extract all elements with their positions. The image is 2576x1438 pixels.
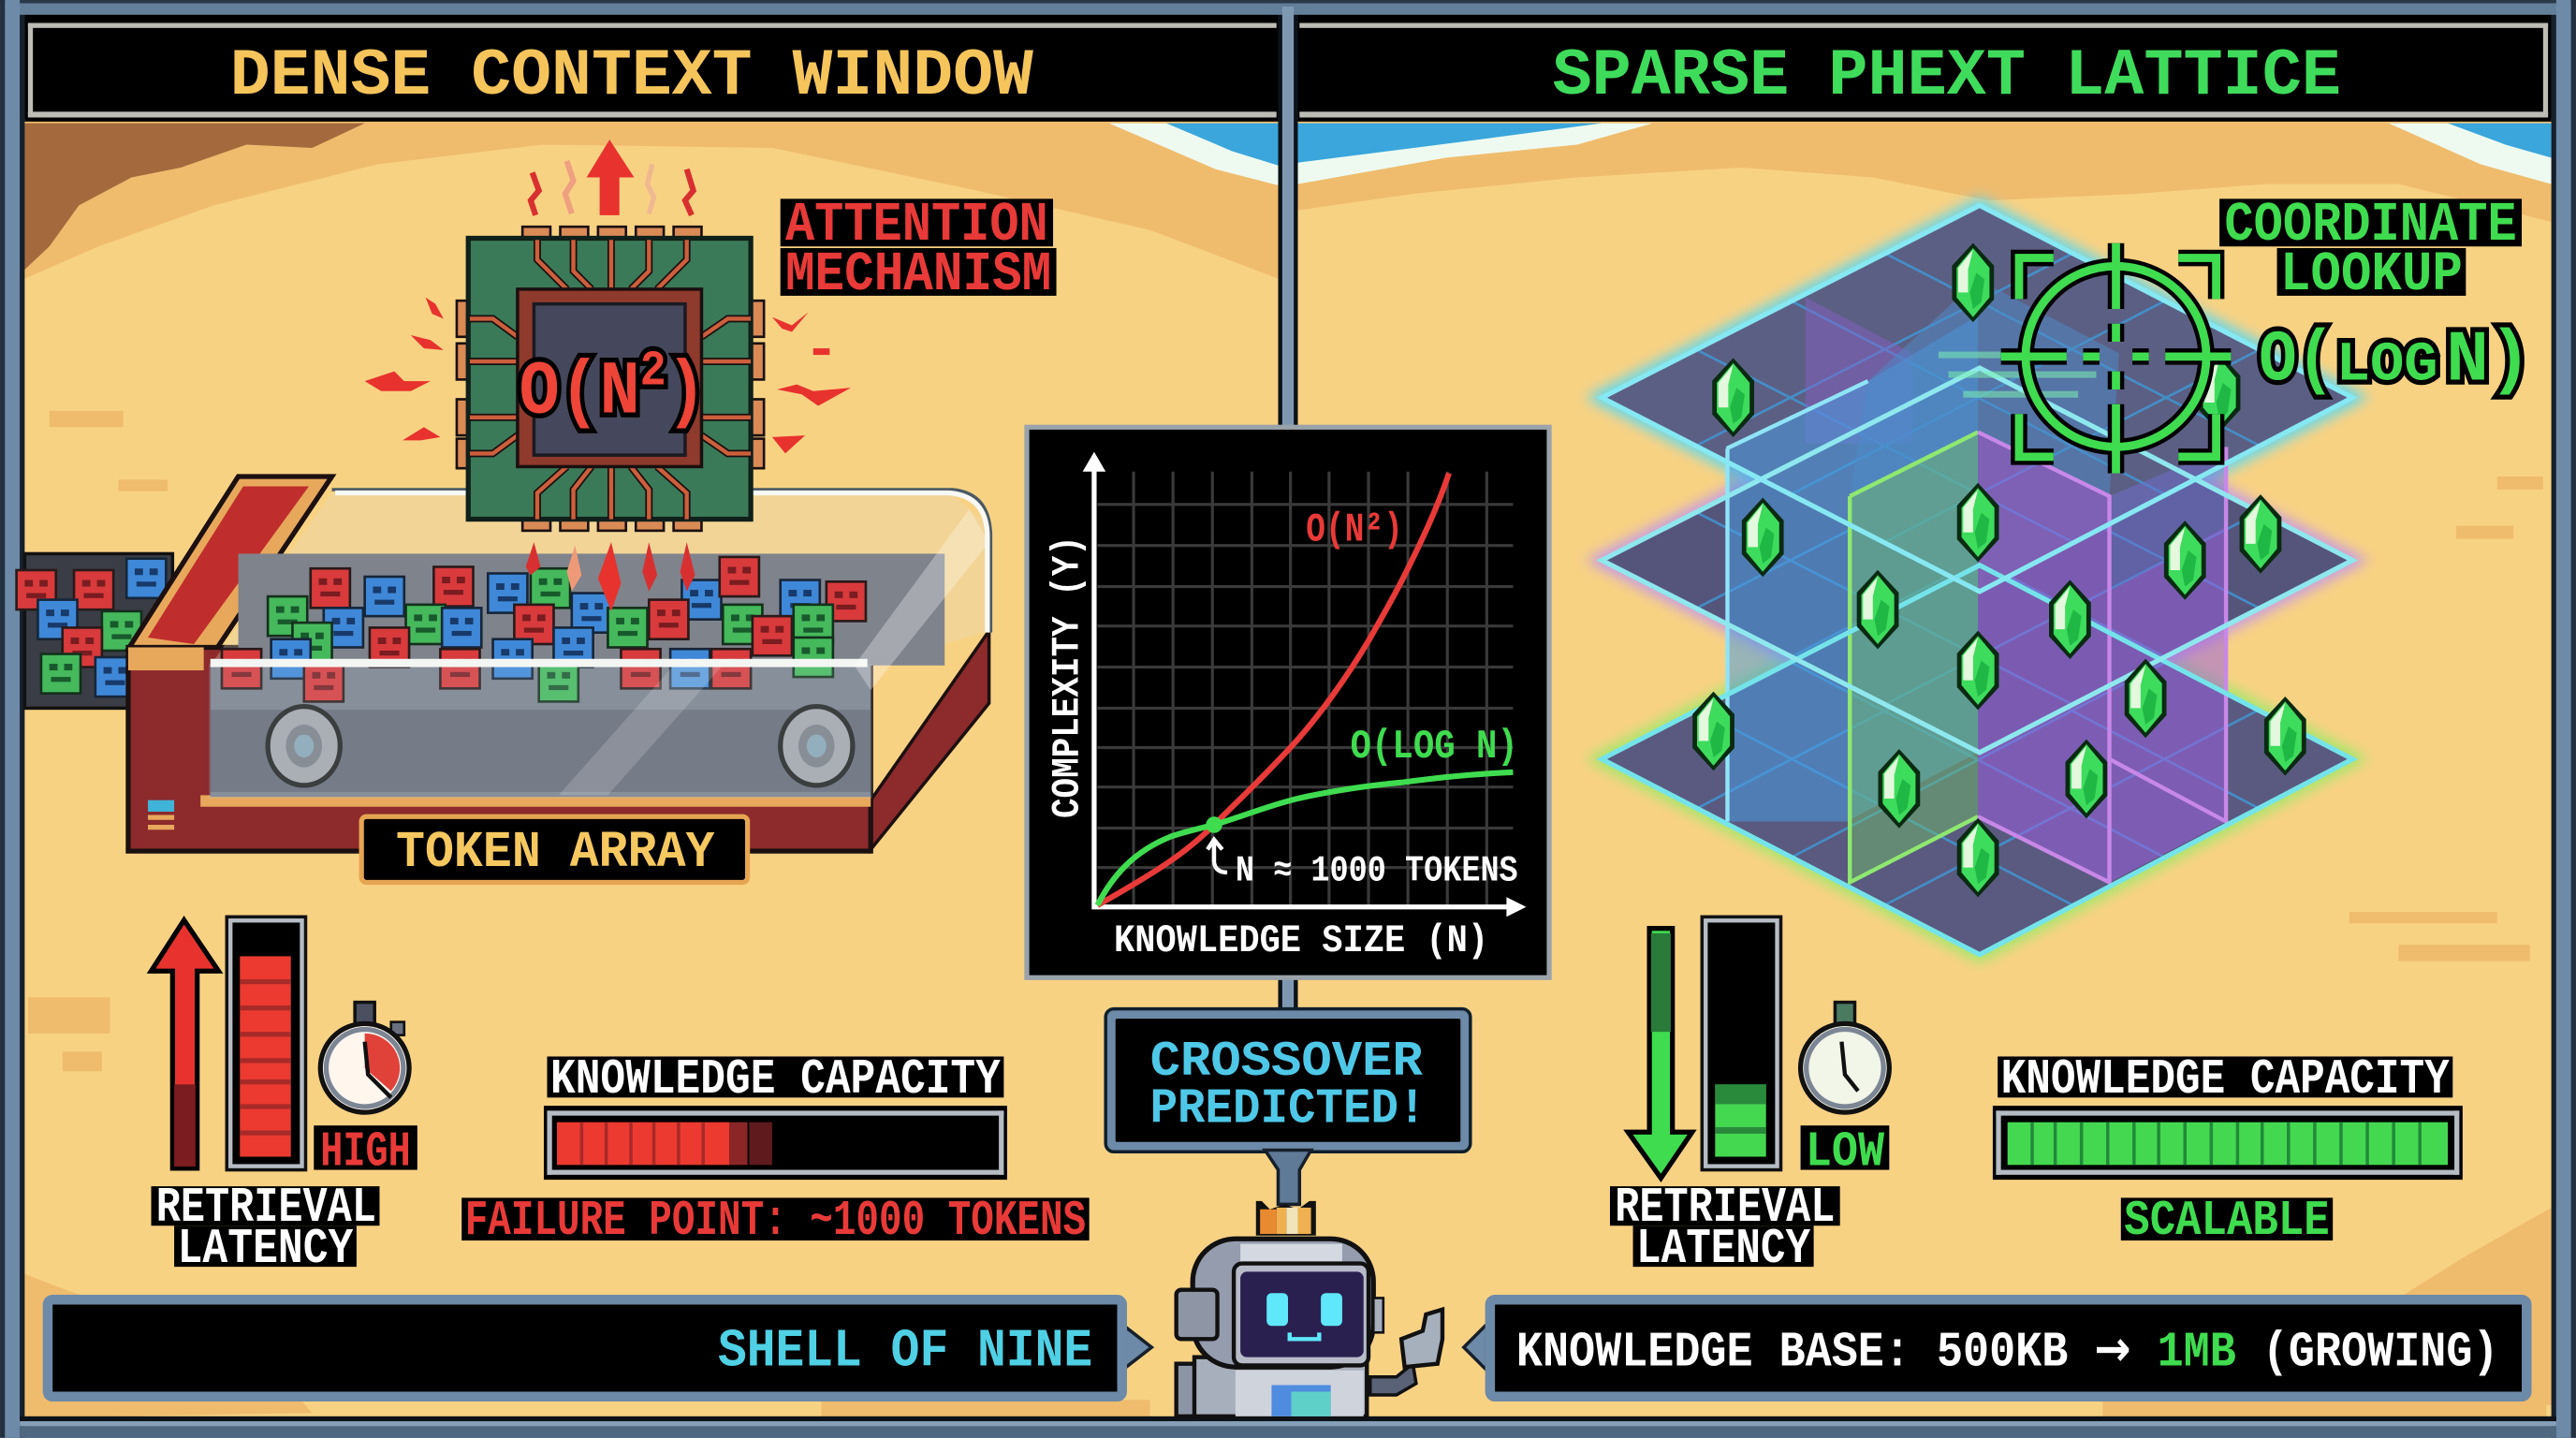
curve: O(N^2) — [1097, 473, 1449, 905]
icon: sparks — [365, 298, 851, 453]
label: failure point: FAILURE POINT: ~1000 TOKENS — [465, 1193, 1086, 1249]
tokens — [222, 557, 866, 701]
callout: crossover predicted: CROSSOVER — [1150, 1034, 1423, 1090]
label: retrieval latency: RETRIEVAL — [156, 1180, 376, 1236]
footer bar: knowledge base: KNOWLEDGE BASE: 500KB → 1MB (GROWING) — [1516, 1320, 2498, 1380]
icon: flames under chip — [526, 542, 695, 611]
icon: target reticle — [2001, 243, 2231, 473]
background: rock — [23, 124, 365, 271]
lattice: phext — [1602, 205, 2352, 955]
label: attention mechanism — [781, 193, 1057, 306]
icon: stopwatch red — [320, 1003, 409, 1112]
glow streaks — [1939, 352, 2096, 398]
latency bar high — [227, 917, 305, 1170]
footer bar: shell of nine — [48, 1299, 1151, 1397]
latency bar low — [1702, 917, 1781, 1170]
crown — [1256, 1201, 1316, 1236]
robot body — [1194, 1357, 1367, 1416]
wheels — [268, 707, 853, 785]
crossover label: N ≈ 1000 TOKENS — [1236, 851, 1518, 892]
label: O(log n): N) — [2446, 320, 2532, 402]
capacity gauge: sparse — [1993, 1051, 2463, 1249]
curve label: O(log N): O(LOG N) — [1351, 724, 1518, 770]
conveyor belt with tokens — [17, 553, 172, 708]
background: water left — [1109, 124, 1280, 185]
crossover point — [1206, 816, 1222, 833]
chip traces — [470, 240, 751, 520]
plate edges — [1602, 205, 2352, 955]
label: high: HIGH — [320, 1123, 411, 1180]
label: attention mechanism: MECHANISM — [785, 242, 1051, 306]
label: coordinate lookup: LOOKUP — [2280, 242, 2463, 306]
footer bar: shell of nine: SHELL OF NINE — [718, 1321, 1092, 1382]
robot right arm — [1370, 1310, 1442, 1395]
chip label: ) — [666, 351, 707, 436]
x axis label: KNOWLEDGE SIZE (N) — [1114, 918, 1488, 963]
robot left arm — [1177, 1364, 1219, 1416]
label: retrieval latency: RETRIEVAL — [1615, 1180, 1835, 1236]
heading bar: sparse phext lattice — [1298, 15, 2552, 122]
lattice glow — [1602, 205, 2352, 955]
label: O(log n): LOG — [2336, 332, 2438, 396]
latency gauge: dense — [152, 917, 417, 1277]
robot head — [1193, 1239, 1373, 1367]
capacity gauge: dense — [461, 1051, 1090, 1249]
bottom plate — [1602, 565, 2352, 955]
label: low: LOW — [1806, 1123, 1884, 1180]
marker arrow — [1208, 840, 1227, 873]
footer bar: knowledge base — [1464, 1299, 2526, 1397]
token array tray — [128, 477, 990, 851]
label: coordinate lookup: COORDINATE — [2224, 193, 2517, 257]
icon: stopwatch green — [1801, 1003, 1889, 1112]
connector to robot — [1265, 1151, 1311, 1204]
y axis label: COMPLEXITY (Y) — [1045, 536, 1090, 818]
robot face — [1266, 1293, 1342, 1339]
callout: crossover predicted: PREDICTED! — [1150, 1081, 1426, 1137]
label: scalable: SCALABLE — [2124, 1193, 2330, 1249]
chart: complexity vs knowledge size — [1027, 427, 1549, 977]
curve: O(log N) — [1097, 772, 1513, 905]
glass cover — [211, 490, 990, 797]
heading bar: dense context window: DENSE CONTEXT WINDOW — [230, 40, 1034, 114]
robot head highlight — [1240, 1244, 1342, 1264]
capacity bar full — [1993, 1106, 2463, 1180]
label: token array: TOKEN ARRAY — [396, 825, 715, 882]
label: retrieval latency: LATENCY — [178, 1221, 354, 1277]
chip: attention mechanism — [457, 227, 764, 531]
icon: up arrow — [152, 920, 218, 1168]
label: O(log n): O( — [2259, 320, 2334, 402]
label: knowledge capacity: KNOWLEDGE CAPACITY — [550, 1051, 1001, 1108]
icon: down arrow — [1628, 929, 1692, 1178]
label: retrieval latency: LATENCY — [1636, 1221, 1810, 1277]
middle plate — [1602, 368, 2352, 753]
latency gauge: sparse — [1610, 917, 1889, 1277]
chart axes — [1083, 452, 1526, 917]
walls — [1727, 279, 2226, 882]
tray interior — [211, 488, 989, 797]
background: water right — [1298, 124, 2552, 184]
robot ears — [1177, 1290, 1383, 1339]
label: coordinate lookup — [2219, 193, 2522, 306]
label: retrieval latency — [1610, 1180, 1840, 1277]
robot mascot — [1177, 1201, 1442, 1416]
label: knowledge capacity: KNOWLEDGE CAPACITY — [2001, 1051, 2450, 1108]
heading bar: sparse phext lattice: SPARSE PHEXT LATTICE — [1553, 40, 2341, 114]
label: retrieval latency — [152, 1180, 379, 1277]
top plate — [1602, 205, 2352, 592]
capacity bar failing — [544, 1106, 1007, 1180]
chip pins — [457, 227, 764, 531]
curve label: O(N^2): O(N²) — [1306, 506, 1403, 553]
label: O(log n) — [2259, 320, 2532, 402]
chart grid — [1097, 472, 1513, 905]
tray base — [128, 477, 989, 851]
chip label: O(N — [520, 351, 655, 436]
gems — [1693, 244, 2305, 895]
icon: heat up arrow and flames — [531, 139, 694, 215]
callout: crossover predicted — [1105, 1009, 1471, 1152]
label: attention mechanism: ATTENTION — [785, 193, 1048, 257]
chip label: 2 — [640, 344, 666, 400]
robot visor — [1234, 1264, 1368, 1365]
heading bar: dense context window — [24, 15, 1278, 122]
